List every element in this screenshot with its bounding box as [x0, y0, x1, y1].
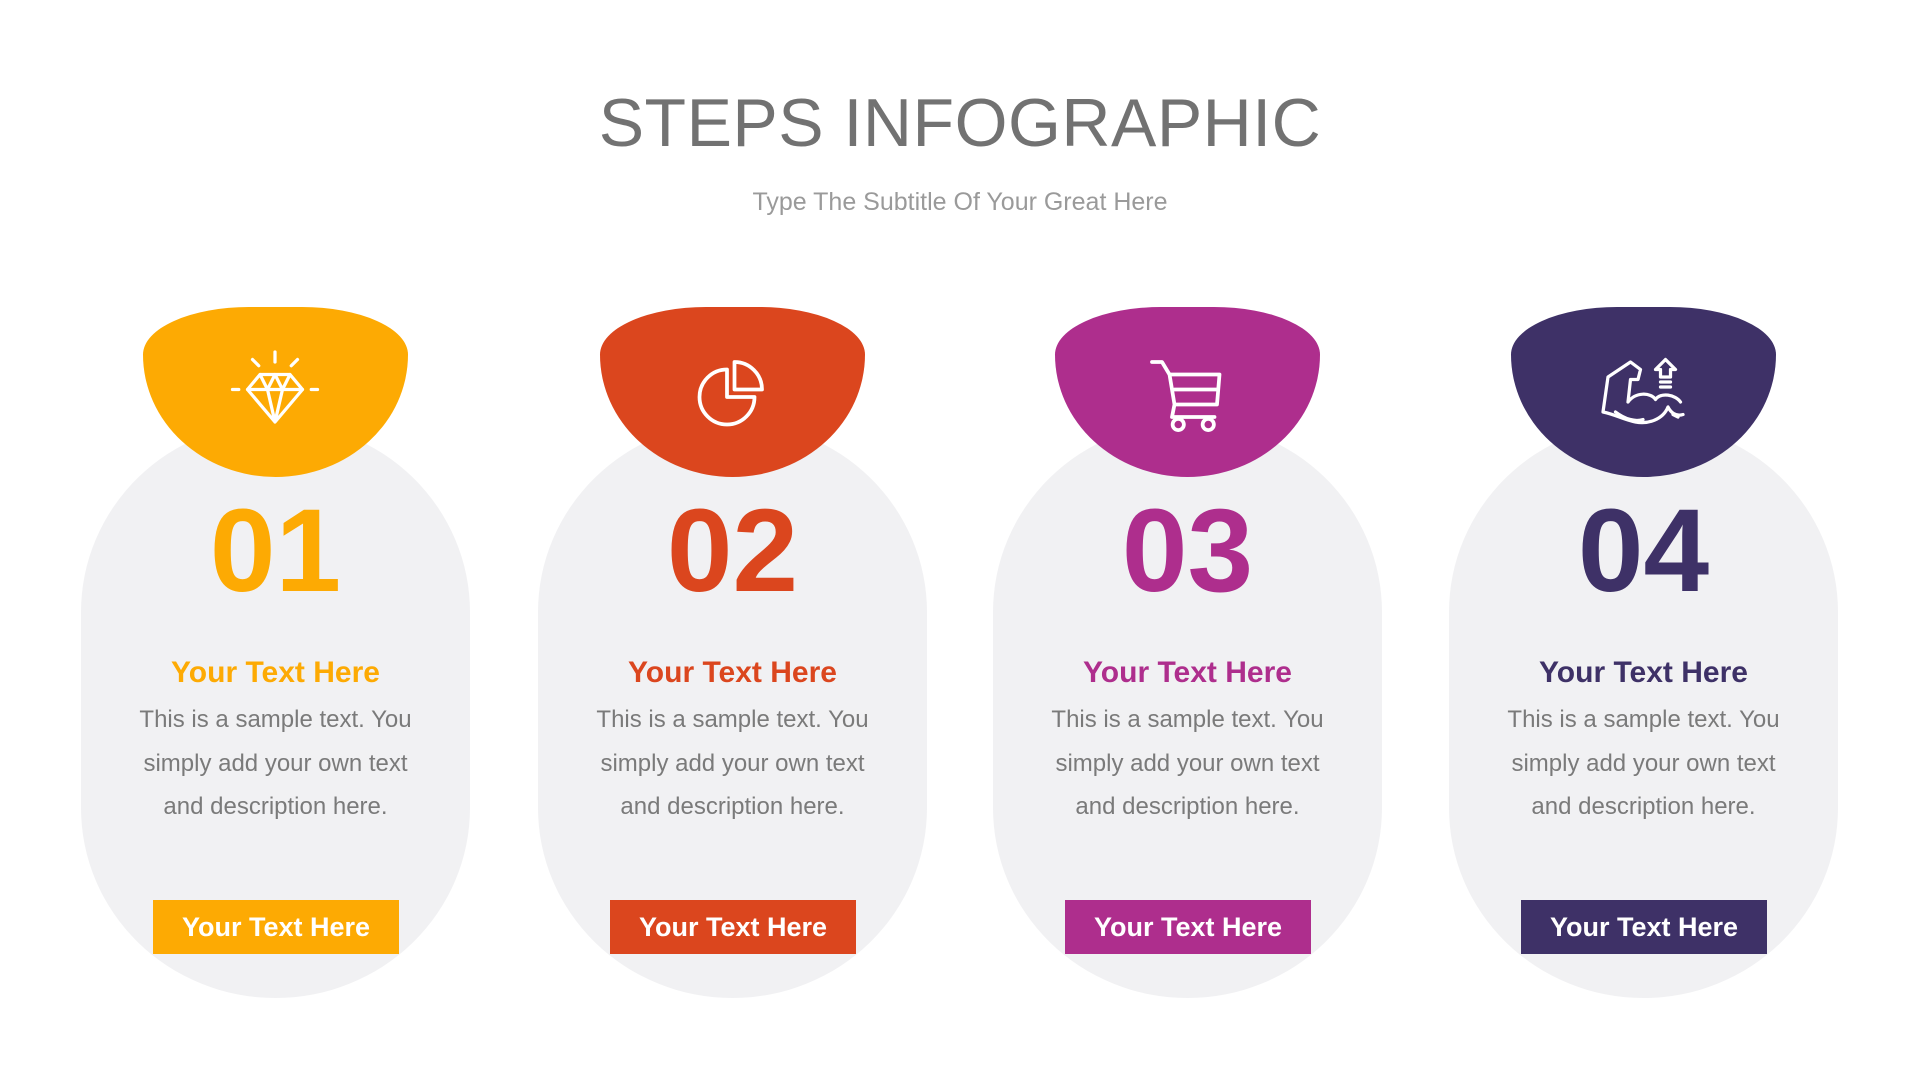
title: STEPS INFOGRAPHIC — [599, 85, 1321, 161]
text: This is a sample text. You simply add your own text and description here. — [1051, 706, 1324, 820]
button — [1065, 900, 1311, 954]
heading: Your Text Here — [1539, 656, 1748, 689]
panel: step 2 — [538, 307, 927, 998]
number: 01 — [210, 485, 341, 617]
heading: Your Text Here — [628, 656, 837, 689]
icon: muscle arm — [1511, 307, 1776, 477]
heading: Your Text Here — [171, 656, 380, 689]
text: This is a sample text. You simply add your own text and description here. — [139, 706, 412, 820]
icon: diamond — [143, 307, 408, 477]
button: Your Text Here — [1094, 912, 1282, 942]
panel: step 4 — [1449, 307, 1838, 998]
button: Your Text Here — [1550, 912, 1738, 942]
button — [610, 900, 856, 954]
subtitle: Type The Subtitle Of Your Great Here — [752, 188, 1168, 216]
button: Your Text Here — [639, 912, 827, 942]
button: Your Text Here — [182, 912, 370, 942]
panel: step 3 — [993, 307, 1382, 998]
panel: step 1 — [81, 307, 470, 998]
text: This is a sample text. You simply add your own text and description here. — [1507, 706, 1780, 820]
heading: Your Text Here — [1083, 656, 1292, 689]
number: 03 — [1122, 485, 1253, 617]
button — [153, 900, 399, 954]
number: 02 — [667, 485, 798, 617]
text: This is a sample text. You simply add your own text and description here. — [596, 706, 869, 820]
icon: shopping cart — [1055, 307, 1320, 477]
number: 04 — [1578, 485, 1709, 617]
button — [1521, 900, 1767, 954]
icon: pie chart — [600, 307, 865, 477]
